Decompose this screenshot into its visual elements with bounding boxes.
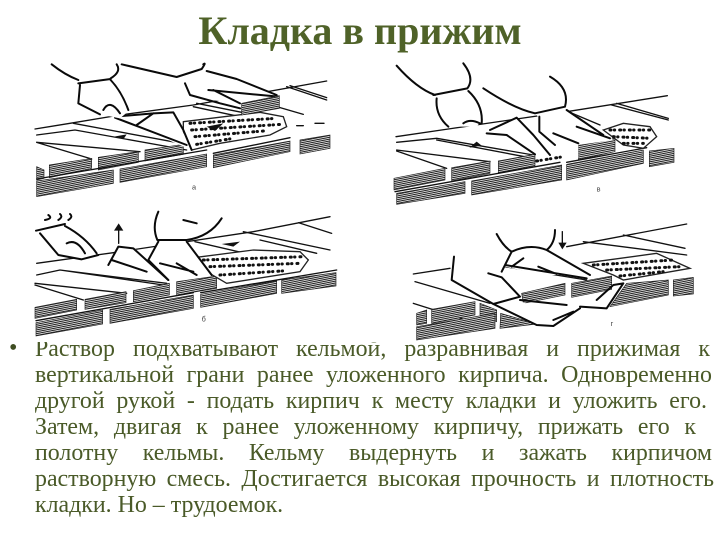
mortar bed bbox=[183, 112, 324, 150]
lower arm and hand bbox=[452, 257, 623, 326]
held brick bbox=[242, 96, 279, 115]
right hand holding brick bbox=[122, 64, 278, 108]
panel b: pressing brick against trowel bbox=[394, 63, 674, 204]
mortar bbox=[197, 250, 308, 283]
brick courses bbox=[394, 96, 674, 204]
text line 6: растворную смесь. Достигается высокая прочность и плотность bbox=[35, 466, 714, 492]
panel c: withdrawing the trowel bbox=[35, 212, 337, 336]
text line 1: Раствор подхватывают кельмой, разравнивая и прижимая к bbox=[35, 336, 710, 362]
brick courses bbox=[35, 217, 337, 336]
right hand pressing bbox=[483, 77, 613, 158]
panel a: spreading mortar with trowel bbox=[35, 64, 330, 197]
caption letter: г bbox=[611, 319, 614, 328]
downward arrow bbox=[558, 232, 567, 249]
arrow bbox=[114, 134, 127, 138]
caption letter: б bbox=[202, 315, 206, 324]
direction arrow bbox=[222, 242, 240, 247]
text line 3: другой рукой - подать кирпич к месту кладки и уложить его. bbox=[35, 388, 707, 414]
text line 2: вертикальной грани ранее уложенного кирпича. Одновременно bbox=[35, 362, 712, 388]
text line 5: полотну кельмы. Кельму выдернуть и зажать кирпичом bbox=[35, 440, 712, 466]
panel d: clamping mortar with brick bbox=[413, 224, 693, 340]
trowel bbox=[115, 112, 192, 150]
upward arrow bbox=[114, 223, 123, 243]
title: Кладка в прижим bbox=[198, 8, 522, 53]
left hand bbox=[397, 63, 483, 127]
brick courses bbox=[35, 81, 330, 197]
caption letter: а bbox=[192, 183, 197, 192]
bullet marker: • bbox=[9, 335, 17, 361]
caption letter: в bbox=[597, 185, 601, 194]
raised trowel bbox=[108, 247, 168, 280]
right hand with brick bbox=[148, 212, 222, 280]
trowel bbox=[487, 118, 550, 155]
arrow bbox=[469, 142, 482, 148]
upper hand pressing brick bbox=[497, 230, 590, 278]
image background bbox=[28, 62, 700, 342]
brick courses bbox=[413, 224, 693, 340]
text line 7: кладки. Но – трудоемок. bbox=[35, 492, 283, 518]
mortar bbox=[537, 123, 657, 161]
left hand bbox=[36, 214, 98, 260]
left hand bbox=[52, 64, 130, 118]
text line 4: Затем, двигая к ранее уложенному кирпичу, прижать его к bbox=[35, 414, 696, 440]
mortar bbox=[583, 253, 690, 280]
